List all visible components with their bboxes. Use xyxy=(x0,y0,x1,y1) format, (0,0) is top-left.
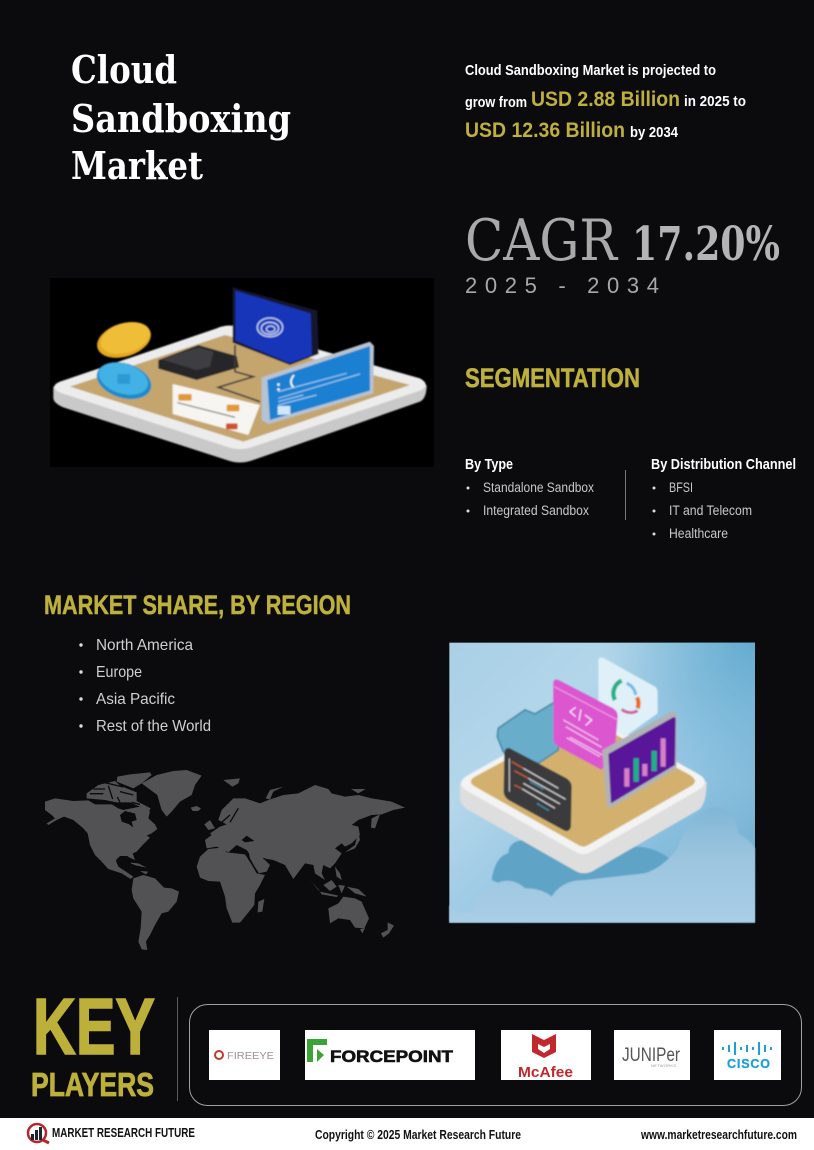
key players heading: PLAYERS xyxy=(31,1066,154,1103)
segment list: by distribution channel: IT and Telecom xyxy=(669,503,752,518)
logo: FireEye: FIREEYE xyxy=(227,1050,274,1062)
logo: Cisco xyxy=(714,1030,781,1080)
logo: Juniper: NETWORKS xyxy=(651,1063,676,1068)
code card dark xyxy=(504,748,572,831)
blue screen xyxy=(262,342,374,424)
region list xyxy=(79,637,211,735)
copyright: Copyright © 2025 Market Research Future xyxy=(315,1128,521,1142)
segment list: by type: Standalone Sandbox xyxy=(483,480,594,495)
gold coin xyxy=(93,316,155,364)
title: Market xyxy=(71,143,203,188)
platform xyxy=(460,712,707,873)
platform base xyxy=(53,326,427,462)
logo: Forcepoint xyxy=(305,1030,475,1080)
logo: Cisco: CISCO xyxy=(727,1057,770,1071)
payment card xyxy=(173,384,260,435)
illustration: sandbox security platform xyxy=(50,278,434,467)
title: Sandboxing xyxy=(71,96,291,141)
market projection text: in 2025 to xyxy=(684,93,746,110)
key players panel xyxy=(190,1004,802,1106)
code card pink xyxy=(553,679,618,770)
region list: Rest of the World xyxy=(96,718,211,735)
logo: McAfee: McAfee xyxy=(518,1064,573,1081)
key players heading: KEY xyxy=(33,982,155,1071)
logo: McAfee xyxy=(501,1030,591,1081)
market projection text: by 2034 xyxy=(630,124,679,141)
donut chart card xyxy=(598,657,658,737)
CAGR figure: 2025 - 2034 xyxy=(465,273,659,298)
key players heading xyxy=(31,982,155,1103)
clouds xyxy=(449,807,755,923)
segment list: by distribution channel: BFSI xyxy=(669,480,693,495)
market projection text: USD 2.88 Billion xyxy=(531,87,680,111)
market projection text xyxy=(465,62,746,142)
logo: Forcepoint: FORCEPOINT xyxy=(330,1047,454,1066)
title xyxy=(71,47,291,188)
blue monitor xyxy=(233,287,319,365)
market projection text: grow from xyxy=(465,94,527,111)
segment list: by type: By Type xyxy=(465,456,513,473)
bar chart card xyxy=(602,712,677,808)
segment list: by distribution channel xyxy=(651,456,796,541)
router xyxy=(158,345,239,380)
segment list: by distribution channel: Healthcare xyxy=(669,526,728,541)
folder xyxy=(497,700,558,763)
market projection text: Cloud Sandboxing Market is projected to xyxy=(465,62,716,79)
region list: Asia Pacific xyxy=(96,691,175,708)
segment list: by type xyxy=(465,456,594,518)
footer xyxy=(0,1118,814,1150)
region list: North America xyxy=(96,637,193,654)
logo icon: market research future xyxy=(28,1124,49,1143)
region list: Europe xyxy=(96,664,142,681)
logo: Juniper: JUNIPer xyxy=(622,1045,681,1066)
segment list: by type: Integrated Sandbox xyxy=(483,503,589,518)
heading: market share by region: MARKET SHARE, BY REGION xyxy=(44,590,351,620)
logo: Juniper xyxy=(614,1030,690,1080)
CAGR figure: CAGR xyxy=(465,208,619,274)
heading: segmentation: SEGMENTATION xyxy=(465,363,640,393)
logo: FireEye xyxy=(209,1030,280,1080)
cable xyxy=(218,345,260,402)
title: Cloud xyxy=(71,47,177,92)
world map xyxy=(45,770,405,950)
illustration: cloud platform xyxy=(449,643,755,923)
CAGR figure xyxy=(465,208,780,298)
market projection text: USD 12.36 Billion xyxy=(465,118,625,142)
blue coin xyxy=(92,356,156,405)
footer brand name: MARKET RESEARCH FUTURE xyxy=(52,1126,195,1140)
